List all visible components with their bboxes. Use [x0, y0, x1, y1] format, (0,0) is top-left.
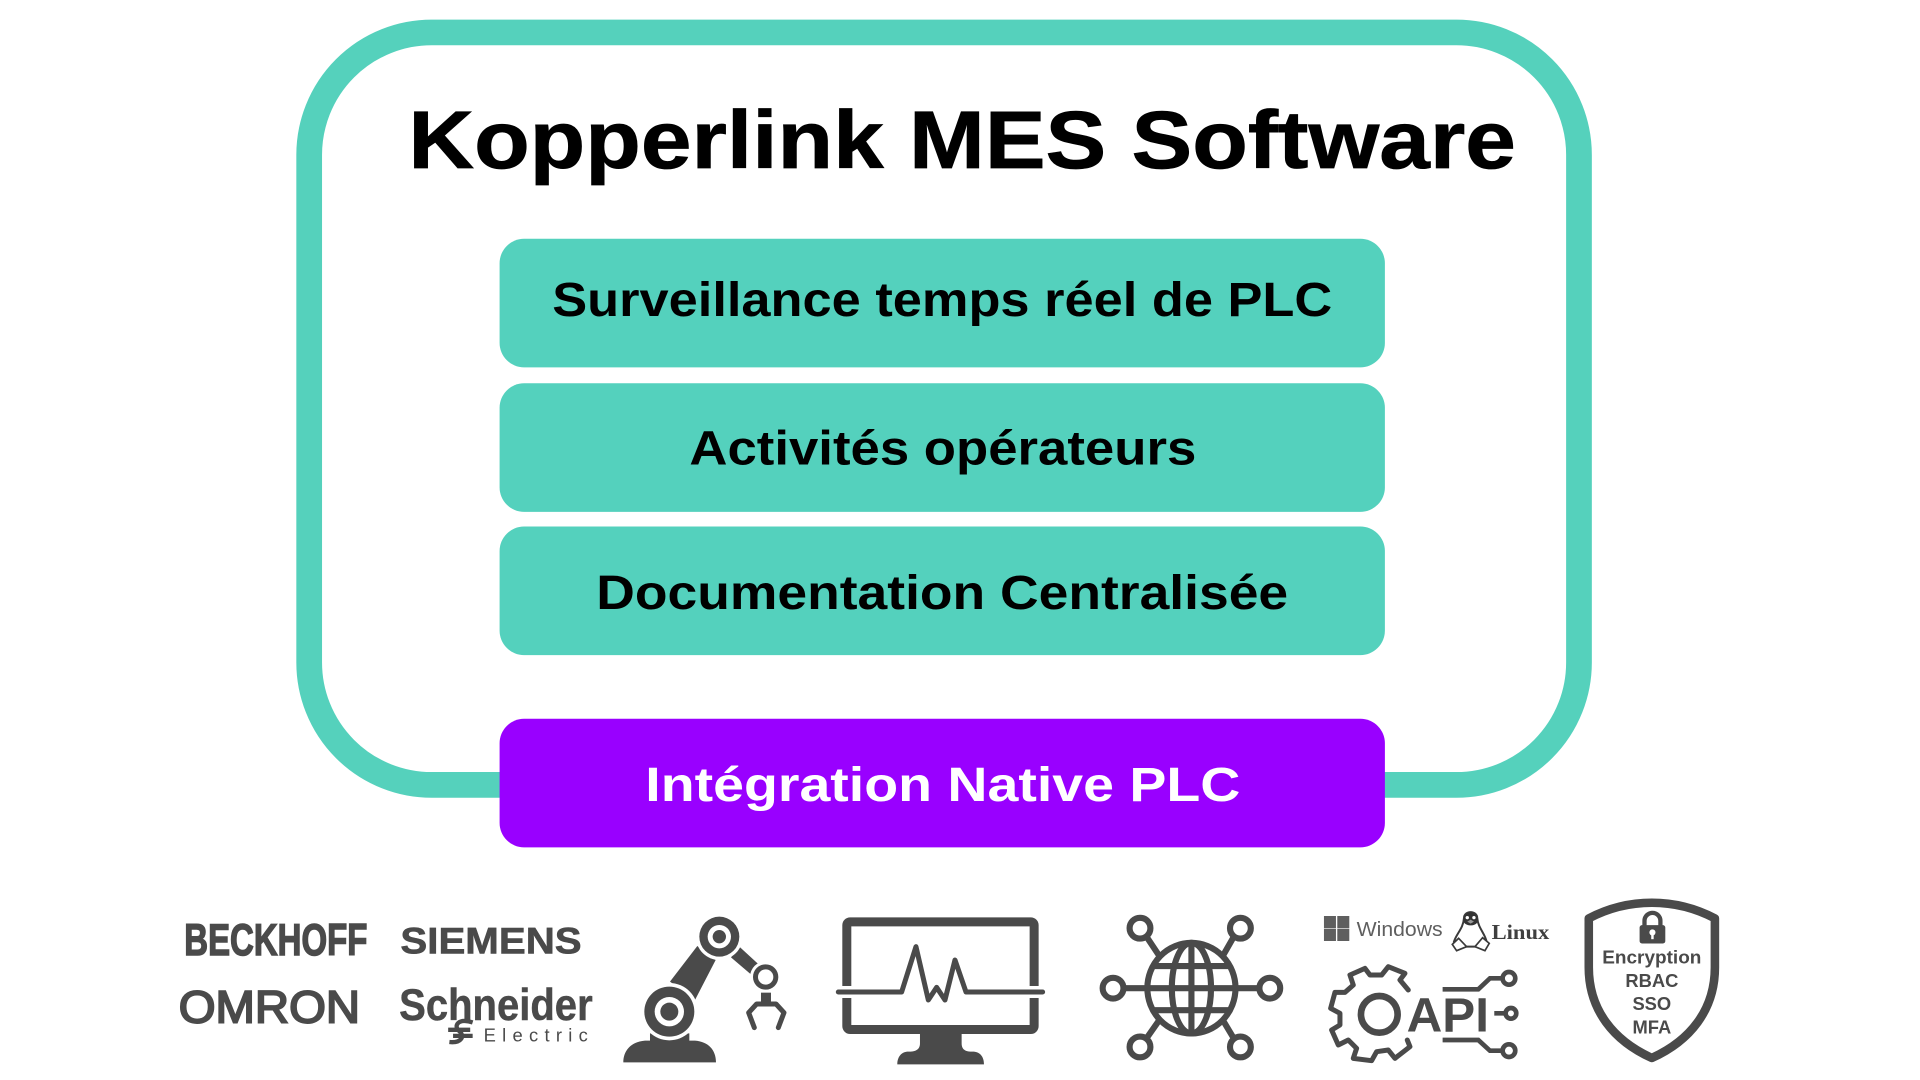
feature: intégration PLC	[500, 719, 1385, 847]
security labels: MFA	[1632, 1016, 1671, 1037]
feature: activités	[500, 383, 1385, 512]
icon: OAPI gear: API	[1407, 989, 1489, 1043]
logo: Windows: Windows	[1357, 918, 1443, 941]
security labels: Encryption	[1602, 946, 1701, 967]
logo: Linux: Linux	[1492, 922, 1550, 944]
logo: Windows	[1324, 916, 1443, 941]
logos: PLC vendors	[179, 916, 593, 1046]
icon: monitor with pulse	[838, 922, 1043, 1064]
feature: documentation: Documentation Centralisée	[596, 567, 1288, 620]
feature: activités: Activités opérateurs	[689, 423, 1196, 476]
security labels	[1602, 946, 1701, 1037]
logo: Linux	[1452, 912, 1550, 951]
feature: documentation	[500, 527, 1385, 655]
icon: network globe	[1103, 918, 1280, 1057]
icon: OAPI gear	[1331, 967, 1516, 1061]
title: Kopperlink MES Software	[408, 95, 1516, 186]
logo: Omron: OMRON	[179, 981, 360, 1032]
feature: surveillance: Surveillance temps réel de PLC	[552, 274, 1332, 327]
logo: Schneider Electric: Electric	[484, 1025, 588, 1046]
security labels: SSO	[1632, 993, 1671, 1014]
icon: padlock	[1640, 913, 1665, 943]
logo: Schneider Electric: Schneider	[399, 981, 593, 1030]
logo: Beckhoff: BECKHOFF	[184, 916, 367, 965]
feature: intégration PLC: Intégration Native PLC	[645, 759, 1240, 812]
logo: Siemens: SIEMENS	[400, 920, 582, 961]
security labels: RBAC	[1625, 970, 1678, 991]
feature: surveillance	[500, 239, 1385, 367]
icon: robot arm	[623, 913, 784, 1062]
panel: software frame	[309, 32, 1579, 785]
icon: security shield	[1589, 903, 1715, 1058]
